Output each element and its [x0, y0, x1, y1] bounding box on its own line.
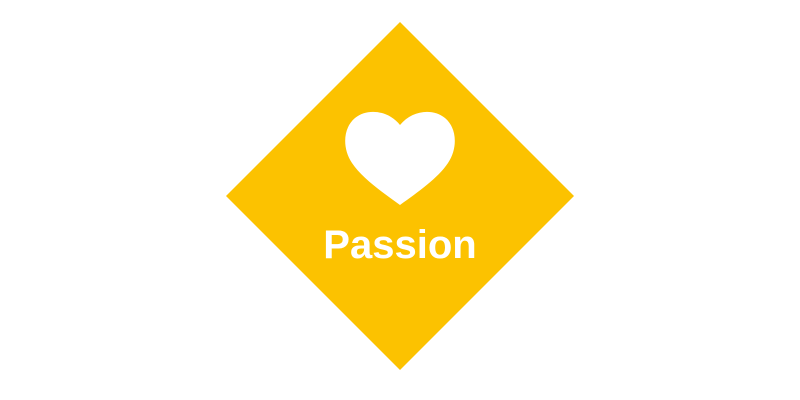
- icon: heart: [345, 112, 455, 205]
- label: Passion: Passion: [323, 223, 477, 267]
- panel: yellow diamond: [226, 22, 574, 370]
